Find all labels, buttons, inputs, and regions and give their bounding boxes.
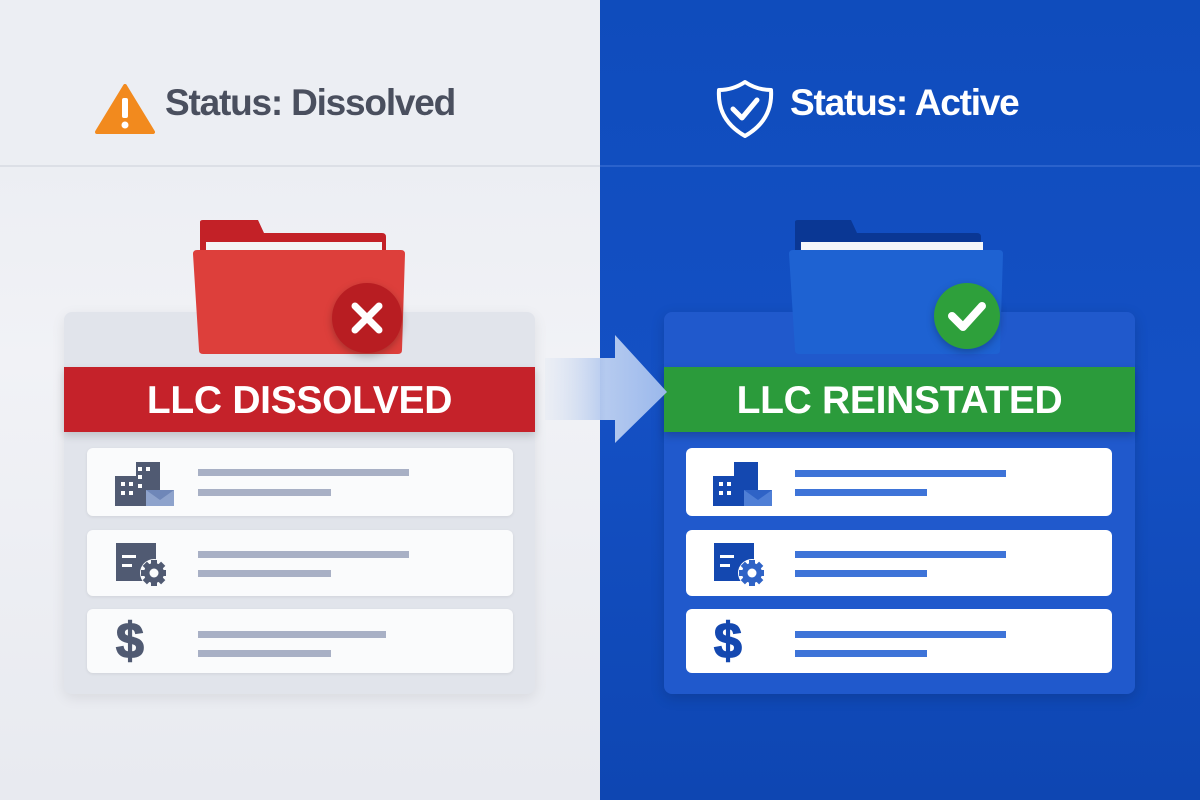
right background bbox=[600, 0, 1200, 800]
heading: Status Dissolved bbox=[95, 82, 455, 134]
icon: warning bbox=[95, 84, 155, 134]
banner: LLC DISSOLVED: LLC DISSOLVED bbox=[147, 379, 452, 422]
row: dollar bbox=[87, 609, 513, 673]
heading: Status Dissolved: Status: Dissolved bbox=[165, 82, 455, 123]
heading: Status Active bbox=[716, 80, 1019, 138]
icon: dollar: $ bbox=[714, 613, 742, 669]
panel: reinstated bbox=[664, 312, 1135, 694]
banner: LLC DISSOLVED bbox=[64, 367, 535, 432]
row: business bbox=[686, 448, 1112, 516]
icon: building bbox=[115, 462, 174, 506]
icon: building bbox=[713, 462, 772, 506]
icon: document gear bbox=[116, 543, 166, 586]
banner: LLC REINSTATED: LLC REINSTATED bbox=[737, 379, 1062, 422]
row: settings bbox=[686, 530, 1112, 596]
icon: red folder with X bbox=[193, 220, 406, 360]
row: business bbox=[87, 448, 513, 516]
arrow bbox=[551, 335, 667, 443]
icon: blue folder with check bbox=[789, 220, 1004, 356]
icon: document gear bbox=[714, 543, 764, 586]
icon: shield check bbox=[716, 80, 774, 138]
heading: Status Active: Status: Active bbox=[790, 82, 1019, 123]
row: dollar bbox=[686, 609, 1112, 673]
left background bbox=[0, 0, 600, 800]
panel: dissolved bbox=[64, 312, 535, 694]
icon: dollar: $ bbox=[116, 613, 144, 669]
banner: LLC REINSTATED bbox=[664, 367, 1135, 432]
row: settings bbox=[87, 530, 513, 596]
